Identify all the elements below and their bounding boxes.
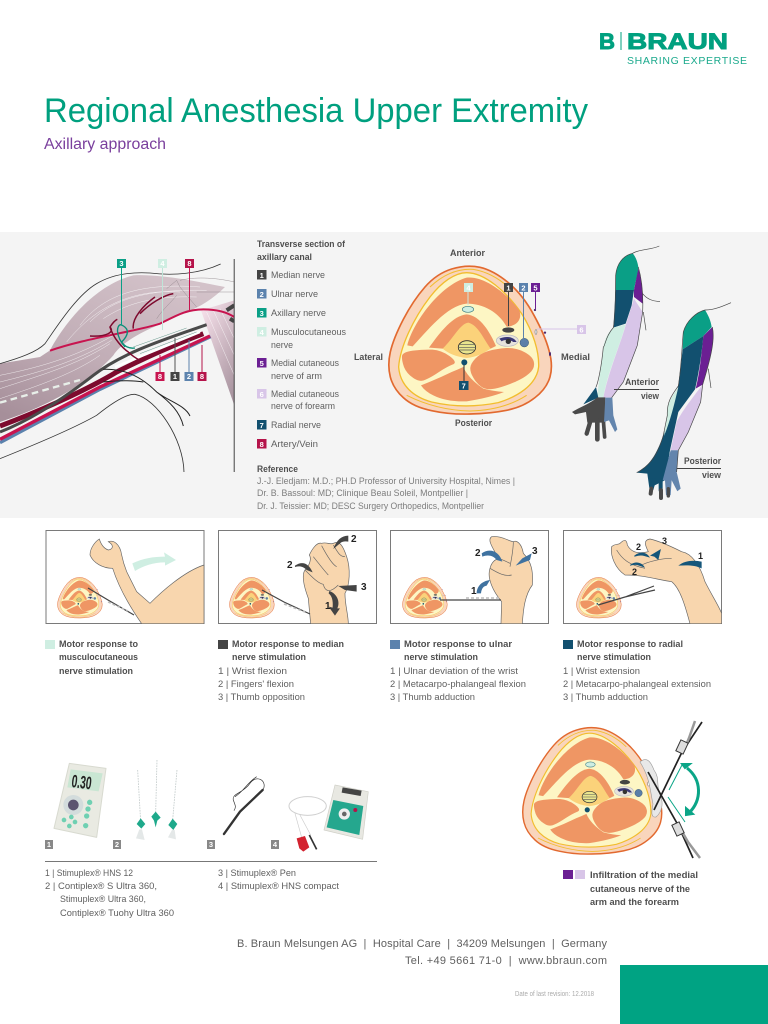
label: posterior view: view [702, 470, 722, 481]
product 3: Stimuplex Pen: 3 [209, 840, 213, 849]
direction labels [354, 248, 590, 429]
legend item 3: Axillary nerve [271, 308, 326, 319]
text: median response: 3 | Thumb opposition [218, 692, 305, 703]
label 1 median nerve [170, 338, 180, 381]
label: anterior view [614, 377, 660, 402]
section tag 7: 7 [462, 382, 466, 390]
label 8 vein: 8 [200, 372, 204, 381]
section tag 1 [504, 283, 513, 326]
teal movement arrows [668, 764, 699, 822]
arrow numbers: 2 [636, 542, 641, 552]
arm illustration [90, 539, 204, 624]
mini section [58, 577, 102, 618]
needle insertion lines [648, 721, 702, 858]
label 8 lower artery [156, 355, 164, 381]
mini section [577, 577, 621, 618]
product 4: Stimuplex HNS compact [271, 785, 368, 852]
text: ulnar response: 1 | Ulnar deviation of the wrist [390, 666, 518, 677]
text: musculocutaneous response: Motor response to [59, 639, 138, 650]
label: posterior view [677, 456, 722, 481]
legend item 1: Median nerve [271, 270, 325, 281]
text: median response: 2 | Fingers' flexion [218, 679, 294, 690]
text: product list left: 1 | Stimuplex® HNS 12 [45, 868, 133, 879]
text: radial response: Motor response to radial [577, 639, 683, 650]
product 2: Contiplex needles [113, 760, 177, 849]
diagram: infiltration [523, 721, 702, 858]
text: musculocutaneous response: musculocutaneous [59, 652, 138, 663]
text: product list right: 4 | Stimuplex® HNS compact [218, 881, 339, 892]
logo: B. Braun: BRAUN [627, 29, 728, 54]
product 4: Stimuplex HNS compact: 4 [273, 840, 278, 849]
text: radial response [563, 639, 711, 703]
text: radial response: 2 | Metacarpo-phalangeal extension [563, 679, 711, 690]
direction labels: Anterior [450, 248, 485, 259]
label 2 ulnar nerve [184, 340, 194, 381]
text: ulnar response: nerve stimulation [404, 652, 478, 663]
reference: J.-J. Eledjam: M.D.; PH.D Professor of University Hospital, Nimes | [257, 476, 515, 487]
label 8 top artery: 8 [187, 259, 192, 268]
section tag 1: 1 [506, 284, 511, 292]
label 1 median nerve: 1 [173, 372, 177, 381]
legend item 2: 2 [260, 290, 264, 299]
arrow numbers [632, 536, 703, 577]
diagram: transverse section [354, 248, 590, 429]
section tag 4: 4 [466, 284, 471, 292]
label: anterior view: Anterior [625, 377, 659, 388]
section tag 6 [537, 325, 586, 334]
label 8 lower artery: 8 [158, 372, 162, 381]
direction labels: Posterior [455, 418, 492, 429]
legend item 4: Musculocutaneous [271, 327, 346, 338]
text: product list left [45, 868, 174, 919]
needle [598, 586, 655, 605]
section tag 7 [459, 365, 468, 390]
section tag 2 [519, 283, 528, 342]
label 4 musculocutaneous nerve: 4 [160, 259, 165, 268]
text: infiltration caption: cutaneous nerve of the [590, 884, 690, 895]
hand illustration [611, 539, 722, 624]
legend: transverse section of axillary canal: axillary canal [257, 252, 312, 263]
product 3: Stimuplex Pen [207, 777, 264, 849]
footer address [237, 938, 608, 967]
text: median response: Motor response to median [232, 639, 344, 650]
reference: Dr. J. Teissier: MD; DESC Surgery Orthopedics, Montpellier [257, 501, 484, 512]
text: radial response: 1 | Wrist extension [563, 666, 640, 677]
section tag 5 [531, 283, 540, 309]
label: anterior view: view [641, 391, 660, 402]
arrow numbers: 3 [532, 546, 538, 557]
needle [262, 590, 310, 614]
legend item 5: nerve of arm [271, 371, 322, 382]
arrow numbers: 2 [351, 534, 357, 545]
legend: transverse section of axillary canal [257, 239, 346, 450]
label 4 musculocutaneous nerve [158, 259, 167, 330]
text: ulnar response: 2 | Metacarpo-phalangeal flexion [390, 679, 526, 690]
diagram: axillary anatomy of the arm [0, 259, 235, 472]
text: ulnar response: 3 | Thumb adduction [390, 692, 475, 703]
panel: musculocutaneous motor response [46, 530, 204, 624]
text: product list left: 2 | Contiplex® S Ultra 360, [45, 881, 157, 892]
text: infiltration caption [563, 870, 698, 908]
legend item 8: 8 [260, 440, 264, 449]
legend item 4: nerve [271, 340, 293, 351]
legend item 6: 6 [260, 390, 264, 399]
label 3 axillary nerve [117, 259, 126, 325]
arrow numbers: 2 [287, 560, 293, 571]
needle [440, 598, 501, 600]
text: infiltration caption: Infiltration of the medial [590, 870, 698, 881]
text: median response [218, 639, 344, 703]
logo: B. Braun: SHARING EXPERTISE [627, 55, 747, 67]
text: radial response: nerve stimulation [577, 652, 651, 663]
infiltration area [640, 760, 662, 817]
logo: B. Braun [599, 29, 747, 67]
section tag 2: 2 [521, 284, 526, 292]
direction labels: Medial [561, 352, 590, 363]
text: musculocutaneous response [45, 639, 138, 677]
arrow numbers: 1 [325, 601, 331, 612]
label 8 vein [198, 345, 206, 381]
legend: transverse section of axillary canal: Transverse section of [257, 239, 346, 250]
reference: Dr. B. Bassoul: MD; Clinique Beau Soleil, Montpellier | [257, 488, 468, 499]
subtitle: Axillary approach [44, 136, 166, 153]
text: median response: 1 | Wrist flexion [218, 666, 287, 677]
footer address: Tel. +49 5661 71-0 | www.bbraun.com [405, 955, 607, 967]
arrow numbers: 3 [361, 582, 367, 593]
arrow numbers: 1 [698, 551, 703, 561]
title: Regional Anesthesia Upper Extremity [44, 92, 588, 130]
text: product list right: 3 | Stimuplex® Pen [218, 868, 296, 879]
text: median response: nerve stimulation [232, 652, 306, 663]
text: ulnar response [390, 639, 526, 703]
section tag 4 [464, 283, 473, 305]
legend item 2: Ulnar nerve [271, 289, 318, 300]
product 2: Contiplex needles: 2 [115, 840, 119, 849]
text: infiltration caption: arm and the forearm [590, 897, 679, 908]
diagram: arm posterior view [637, 303, 731, 498]
legend item 5: Medial cutaneous [271, 358, 339, 369]
arrow numbers: 3 [662, 536, 667, 546]
text: radial response: 3 | Thumb adduction [563, 692, 648, 703]
legend item 7: 7 [260, 421, 264, 430]
section tag 5: 5 [533, 284, 538, 292]
reference: Reference [257, 464, 298, 475]
direction labels: Lateral [354, 352, 383, 363]
mini section [403, 577, 447, 618]
panel: ulnar motor response [390, 530, 548, 624]
text: product list right [218, 868, 339, 892]
text: product list left: Contiplex® Tuohy Ultra 360 [60, 908, 174, 919]
products [45, 760, 368, 852]
text: musculocutaneous response: nerve stimulation [59, 666, 133, 677]
panel: anatomy background [0, 232, 768, 518]
arrow numbers [471, 546, 538, 597]
legend item 5 [257, 358, 339, 382]
legend item 6 [257, 389, 339, 412]
arrow numbers: 2 [475, 548, 481, 559]
needle [88, 588, 134, 615]
legend item 3: 3 [260, 309, 264, 318]
legend item 8: Artery/Vein [271, 439, 318, 450]
logo: B. Braun: B [599, 29, 615, 54]
legend item 6: Medial cutaneous [271, 389, 339, 400]
legend item 4: 4 [260, 328, 265, 337]
legend item 4 [257, 327, 346, 351]
mini section [230, 577, 274, 618]
label 3 axillary nerve: 3 [119, 259, 124, 268]
arrow numbers: 2 [632, 567, 637, 577]
legend item 6: nerve of forearm [271, 401, 335, 412]
label: posterior view: Posterior [684, 456, 721, 467]
label 8 top artery [185, 259, 194, 310]
text: product list left: Stimuplex® Ultra 360, [60, 894, 146, 905]
fist illustration [295, 536, 357, 624]
product 1: Stimuplex HNS 12 [45, 763, 106, 849]
legend item 1: 1 [260, 271, 264, 280]
text: ulnar response: Motor response to ulnar [404, 639, 512, 650]
product 1: Stimuplex HNS 12: 0.30 [71, 771, 93, 793]
diagram: arm anterior view [572, 246, 660, 439]
label 2 ulnar nerve: 2 [187, 372, 191, 381]
legend item 7: Radial nerve [271, 420, 321, 431]
panel: median motor response [218, 530, 376, 624]
hand illustration [477, 536, 533, 624]
arrow numbers [287, 534, 367, 612]
section tag 6: 6 [579, 326, 584, 334]
footer address: B. Braun Melsungen AG | Hospital Care | 34209 Melsungen | Germany [237, 938, 608, 950]
revision date: Date of last revision: 12.2018 [515, 991, 594, 998]
panel: radial motor response [564, 530, 722, 624]
product 1: Stimuplex HNS 12: 1 [47, 840, 51, 849]
arrow numbers: 1 [471, 586, 477, 597]
reference [257, 464, 515, 512]
legend item 5: 5 [260, 359, 264, 368]
teal corner block [620, 965, 768, 1024]
